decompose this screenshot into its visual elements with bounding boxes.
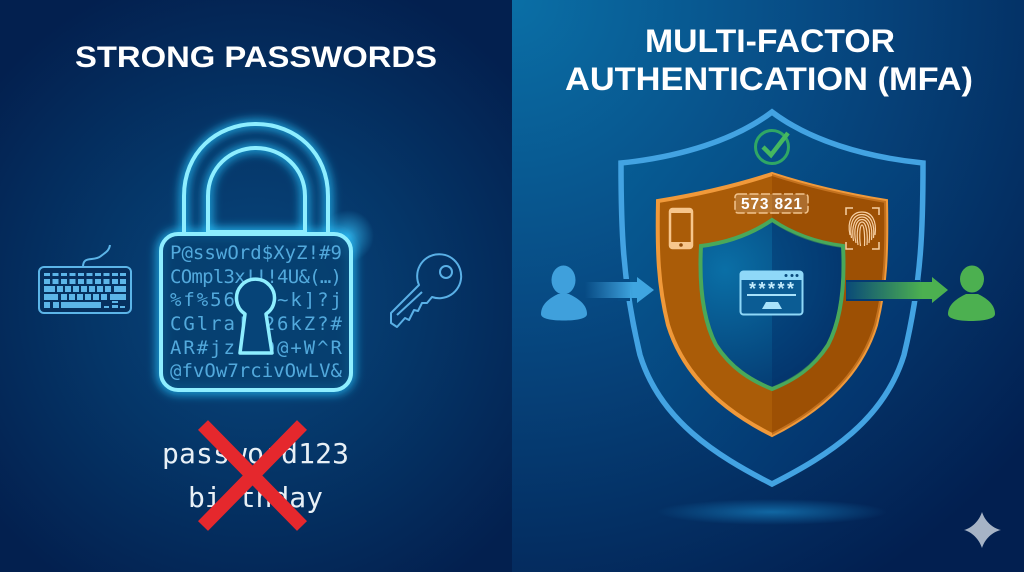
weak passwords text: password123 — [162, 437, 349, 470]
icon: phone — [670, 209, 692, 248]
icon: fingerprint — [846, 208, 879, 249]
orange right half shade — [772, 174, 886, 435]
icon: keyboard — [39, 245, 131, 313]
heading: multi-factor authentication: AUTHENTICATION (MFA) — [565, 61, 973, 97]
icon: login window: ***** — [749, 279, 794, 299]
panel: strong passwords — [0, 0, 512, 572]
icon: sparkle — [964, 512, 1001, 548]
password text inside lock: @fvOw7rcivOwLV& — [170, 360, 343, 382]
heading: multi-factor authentication — [565, 23, 973, 97]
password text inside lock: AR#jz! D@+W^R — [170, 337, 343, 359]
icon: user blue — [541, 266, 587, 320]
shield: inner green layer — [701, 220, 843, 389]
heading: multi-factor authentication: MULTI-FACTOR — [645, 23, 895, 59]
arrow: shield to user — [846, 277, 948, 303]
inner right half shade — [772, 222, 841, 387]
icon: key — [391, 254, 461, 327]
icon: check badge — [756, 130, 788, 164]
floor glow — [657, 499, 887, 525]
icon: red cross — [203, 425, 302, 526]
weak passwords text: birthday — [188, 481, 323, 514]
keyhole — [237, 279, 274, 353]
password text inside lock: %f%569 ~~k]?j — [170, 289, 342, 311]
weak passwords text — [162, 437, 349, 514]
icon: user green — [948, 266, 995, 321]
spot glow at lock corner — [322, 210, 374, 262]
arrow: user to shield — [585, 277, 654, 303]
icon: login window — [740, 271, 803, 314]
gap: left arrow cut through outer shield — [618, 279, 630, 301]
password text inside lock: CGlra! 26kZ?# — [170, 313, 343, 335]
shield: orange layer — [658, 174, 886, 435]
gap: right arrow cut through rings — [846, 280, 920, 301]
icon: padlock — [161, 124, 351, 390]
password text inside lock — [170, 242, 343, 382]
password text inside lock: COmpl3x!!!4U&(…) — [170, 266, 342, 288]
code box: 573 821 — [741, 196, 802, 213]
shield: outer layer — [621, 112, 923, 484]
heading: strong passwords: STRONG PASSWORDS — [75, 41, 437, 74]
panel: multi-factor authentication — [512, 0, 1024, 572]
password text inside lock: P@sswOrd$XyZ!#9 — [170, 242, 342, 264]
